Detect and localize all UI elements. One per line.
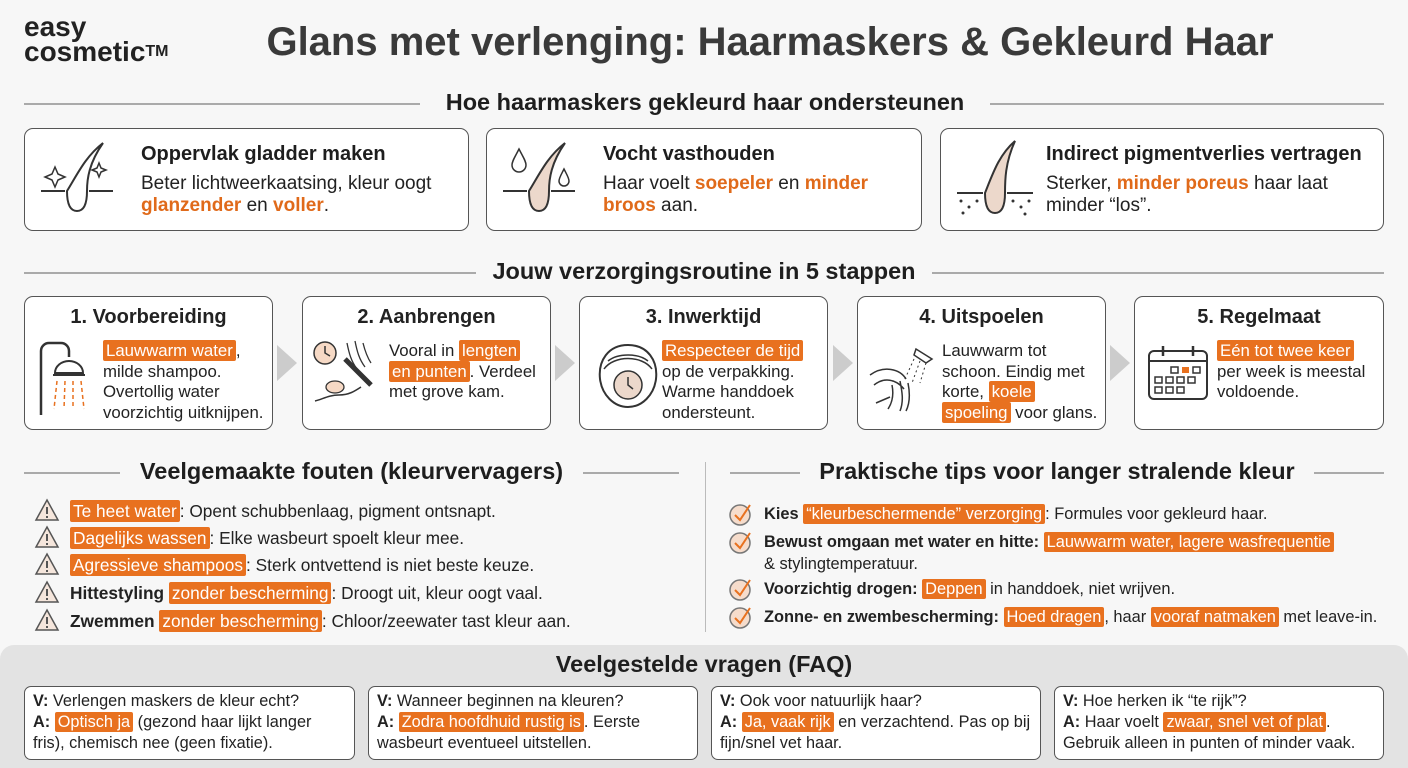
faq 1: A: Optisch ja (gezond haar lijkt langer (33, 713, 311, 731)
tip 3: Voorzichtig drogen: Deppen in handdoek, niet wrijven. (764, 580, 1175, 598)
panel: smooth surface: Oppervlak gladder maken (141, 143, 386, 165)
step 1: Overtollig water (103, 382, 220, 401)
list: mistakes (34, 498, 571, 632)
mistake 3: Agressieve shampoos: Sterk ontvettend is niet beste keuze. (73, 555, 534, 575)
step 1: 1. Voorbereiding (70, 306, 227, 328)
faq 3: A: Ja, vaak rijk en verzachtend. Pas op bij (720, 713, 1030, 731)
step 1 (24, 296, 273, 430)
arrow (555, 345, 575, 381)
faq 1 (24, 686, 355, 760)
faq 3: fijn/snel vet haar. (720, 734, 842, 752)
faq 3: V: Ook voor natuurlijk haar? (720, 692, 922, 710)
step 5: Eén tot twee keer (1220, 341, 1351, 360)
logo: cosmeticTM (24, 36, 169, 67)
panel: smooth surface (24, 128, 469, 231)
step 4: schoon. Eindig met (942, 362, 1085, 380)
panel: FAQ (0, 645, 1408, 768)
icon: hair drops (503, 142, 575, 212)
panel: pigment: Sterker, minder poreus haar laat (1046, 173, 1328, 194)
step 1: Lauwwarm water, (106, 341, 241, 360)
icon: hair follicle (957, 140, 1033, 216)
step 3: ondersteunt. (662, 402, 755, 422)
faq 2: A: Zodra hoofdhuid rustig is. Eerste (377, 713, 640, 731)
panel: moisture: Vocht vasthouden (603, 143, 775, 165)
tip 2: Bewust omgaan met water en hitte: Lauwwarm water, lagere wasfrequentie (764, 533, 1331, 551)
step 2: en punten. Verdeel (392, 362, 536, 380)
heading: routine: Jouw verzorgingsroutine in 5 stappen (492, 258, 916, 284)
faq 1: fris), chemisch nee (geen fixatie). (33, 734, 273, 752)
step 5: voldoende. (1217, 382, 1299, 401)
icon: hair sparkle (41, 142, 113, 212)
panel: smooth surface: Beter lichtweerkaatsing, kleur oogt (141, 173, 431, 194)
heading: FAQ: Veelgestelde vragen (FAQ) (556, 651, 852, 677)
tip 2 (729, 532, 1334, 573)
step 2: Vooral in lengten (389, 341, 517, 360)
faq 4: Gebruik alleen in punten of minder vaak. (1063, 734, 1355, 752)
step 3 (579, 296, 828, 430)
faq 2: V: Wanneer beginnen na kleuren? (377, 692, 624, 710)
panel: pigment (940, 128, 1384, 231)
tip 1: Kies “kleurbeschermende” verzorging: Formules voor gekleurd haar. (764, 505, 1267, 523)
arrow (277, 345, 297, 381)
step 4: spoeling voor glans. (945, 402, 1097, 422)
icon: shower (40, 342, 85, 415)
mistake 2: Dagelijks wassen: Elke wasbeurt spoelt kleur mee. (73, 528, 464, 548)
faq 2: wasbeurt eventueel uitstellen. (377, 734, 592, 752)
step 4: 4. Uitspoelen (919, 306, 1044, 328)
faq 4 (1054, 686, 1384, 760)
panel: moisture: broos aan. (603, 195, 698, 216)
panel: smooth surface: glanzender en voller. (141, 195, 329, 216)
heading: mistakes: Veelgemaakte fouten (kleurvervagers) (140, 458, 563, 484)
step 3: Warme handdoek (662, 382, 794, 401)
step 3: Respecteer de tijd (665, 341, 800, 360)
icon: towel clock (598, 344, 658, 408)
faq 1: V: Verlengen maskers de kleur echt? (33, 692, 299, 710)
step 3: op de verpakking. (662, 362, 794, 380)
step 5: per week is meestal (1217, 362, 1365, 380)
mistake 4: Hittestyling zonder bescherming: Droogt uit, kleur oogt vaal. (70, 583, 543, 603)
step 4 (857, 296, 1106, 430)
step 5 (1134, 296, 1384, 430)
step 2: met grove kam. (389, 382, 505, 401)
logo (24, 11, 169, 67)
arrow (1110, 345, 1130, 381)
step 5: 5. Regelmaat (1197, 306, 1321, 328)
arrow (833, 345, 853, 381)
icon: comb hand (313, 340, 373, 402)
step 2 (302, 296, 551, 430)
faq 2 (368, 686, 698, 760)
step 3: 3. Inwerktijd (646, 306, 761, 328)
step 4: korte, koele (942, 382, 1032, 401)
icon: rinse (870, 348, 934, 412)
step 1: milde shampoo. (103, 362, 221, 380)
step 4: Lauwwarm tot (942, 341, 1046, 360)
logo: easy (24, 11, 86, 42)
panel: moisture (486, 128, 922, 231)
tip 4: Zonne- en zwembescherming: Hoed dragen, haar vooraf natmaken met leave-in. (764, 608, 1377, 626)
panel: pigment: minder “los”. (1046, 195, 1152, 216)
faq 4: A: Haar voelt zwaar, snel vet of plat. (1063, 713, 1331, 731)
step 1: voorzichtig uitknijpen. (103, 402, 263, 422)
faq 4: V: Hoe herken ik “te rijk”? (1063, 692, 1247, 710)
step 2: 2. Aanbrengen (357, 306, 496, 328)
mistake 1: Te heet water: Opent schubbenlaag, pigment ontsnapt. (73, 501, 496, 521)
heading: how masks support: Hoe haarmaskers gekleurd haar ondersteunen (446, 89, 964, 115)
list: tips (729, 504, 1377, 629)
mistake 5: Zwemmen zonder bescherming: Chloor/zeewater tast kleur aan. (70, 611, 571, 631)
tip 2: & stylingtemperatuur. (764, 555, 918, 573)
icon: calendar (1148, 346, 1208, 400)
panel: moisture: Haar voelt soepeler en minder (603, 173, 868, 194)
heading: tips: Praktische tips voor langer stralende kleur (819, 458, 1295, 484)
faq 3 (711, 686, 1041, 760)
title: Glans met verlenging: Haarmaskers & Gekleurd Haar (266, 20, 1274, 64)
panel: pigment: Indirect pigmentverlies vertragen (1046, 143, 1362, 165)
